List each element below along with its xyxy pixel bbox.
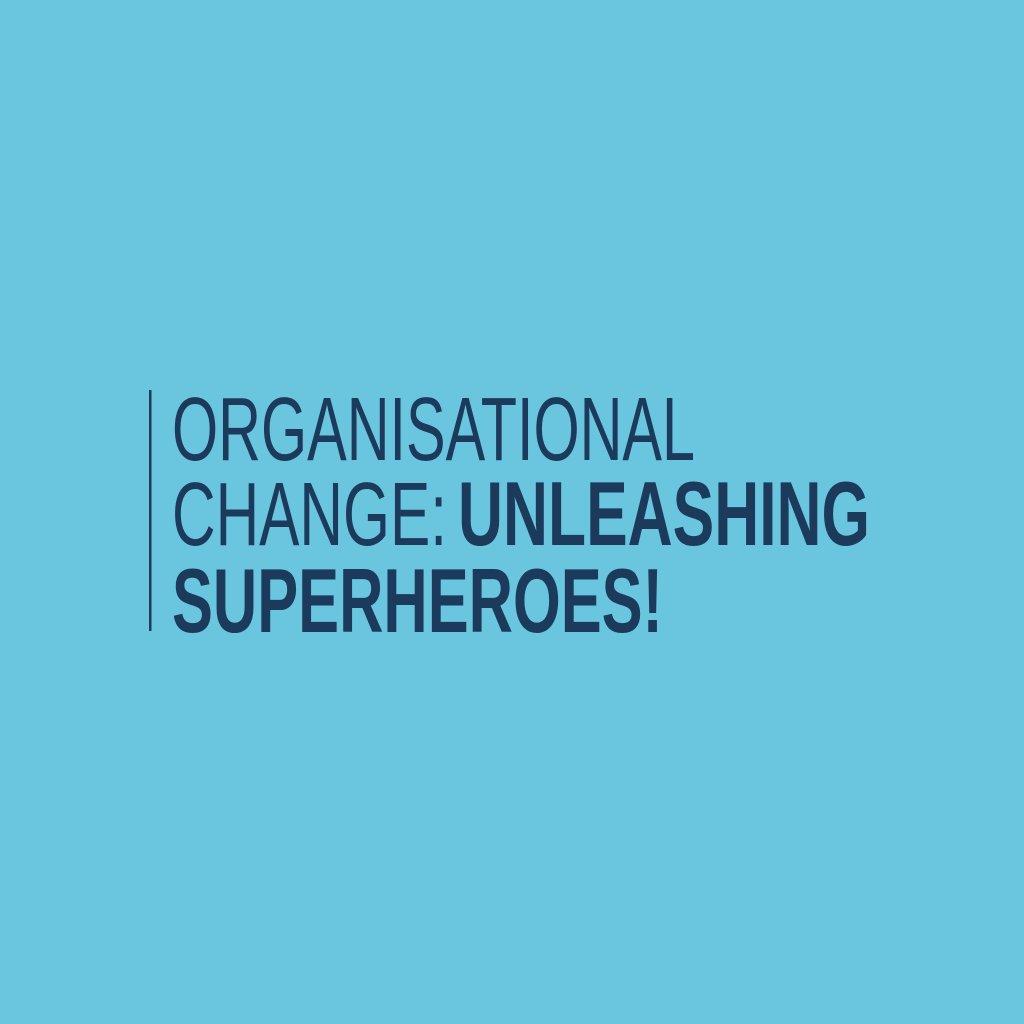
accent bar: [149, 390, 152, 631]
title text: SUPERHEROES!: [172, 551, 663, 652]
title text: CHANGE:: [172, 465, 447, 565]
title text: [172, 380, 870, 652]
title text: ORGANISATIONAL: [172, 380, 695, 480]
